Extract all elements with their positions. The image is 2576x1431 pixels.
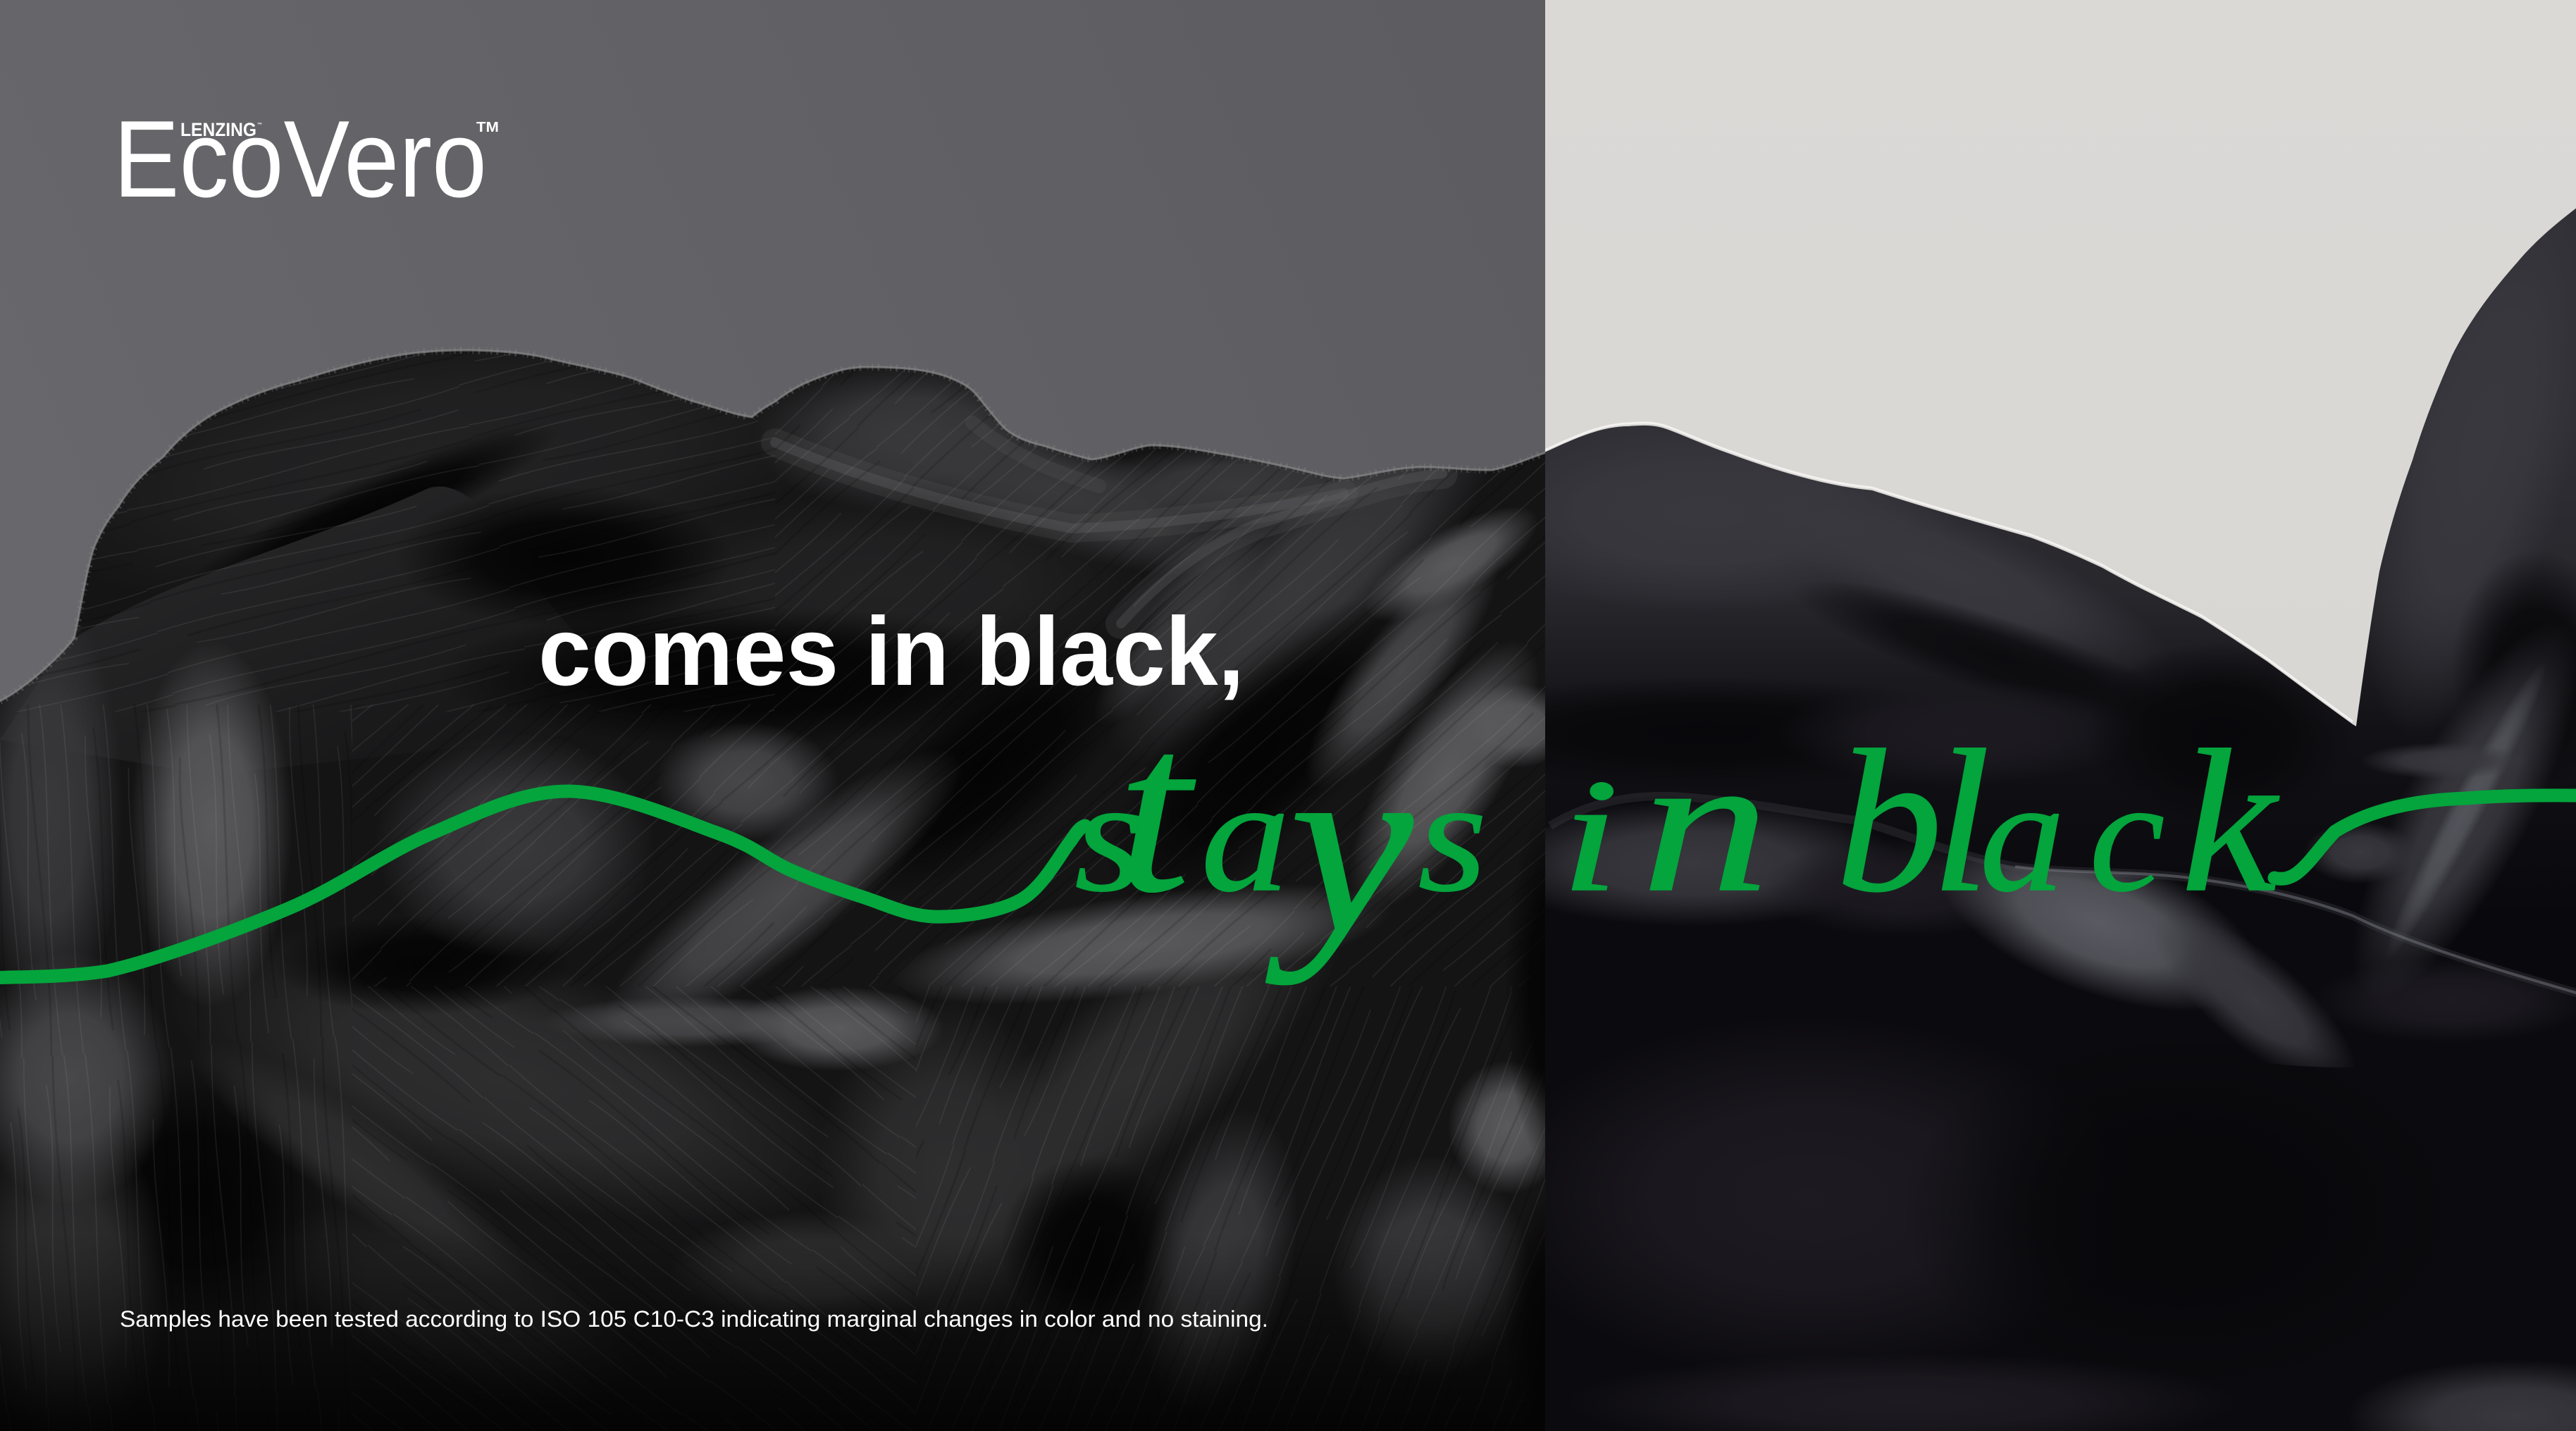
script word black: l: [1931, 709, 1990, 934]
broad fibre shadows and lights: [0, 279, 1544, 1431]
script word stays: a: [1201, 746, 1290, 925]
script word black: b: [1835, 709, 1943, 934]
fold ridge line: [1550, 796, 2576, 996]
logo: Lenzing EcoVero: [113, 98, 499, 220]
fibre silhouette rim: [0, 350, 1550, 701]
dark lower fabric: [1536, 909, 2576, 1431]
fibre hair texture: [0, 317, 1545, 1431]
logo word Lenzing: LENZING: [180, 119, 256, 140]
fabric edge highlight: [1536, 423, 2353, 721]
photo panel: black fibre on grey: [0, 0, 1603, 1431]
upper fabric above the fold ridge: [1536, 197, 2576, 996]
fibre bottom shadow: [0, 1263, 1535, 1431]
upper fold tones: [1409, 142, 2576, 1027]
script word in: i: [1561, 745, 1619, 925]
light backdrop: [1545, 0, 2576, 726]
faint lower folds: [1487, 1015, 2576, 1431]
script word stays: y: [1263, 704, 1416, 986]
script word stays: s: [1075, 746, 1144, 925]
script word black: a: [1980, 746, 2064, 926]
right edge shadows: [1511, 853, 1545, 1382]
footnote: Samples have been tested according to ISO 105 C10-C3 indicating marginal changes in color and no staining.: [120, 1306, 1268, 1332]
photo panel: black fabric on light backdrop: [1545, 0, 2576, 1431]
headline: comes in black,: [538, 597, 1244, 706]
green wave entering the script: [0, 791, 1085, 978]
script word black: c: [2089, 746, 2165, 926]
fabric mass: [1545, 209, 2576, 1431]
lit area below the fold ridge: [1480, 799, 2576, 1117]
fibre base tone: [0, 317, 1545, 1431]
green wave leaving the script: [2274, 795, 2576, 879]
trademark: TM: [476, 120, 499, 135]
lit fibre ridges: [775, 423, 1442, 624]
fibre strands: [0, 485, 1578, 1325]
script word stays: t: [1117, 677, 1199, 942]
fibre mass: [0, 279, 1603, 1431]
second strand with crisp upper edge: [58, 486, 506, 762]
small trademark on Lenzing: ™: [257, 123, 262, 128]
handwritten line: wave and stays in black: [0, 677, 2576, 986]
script word stays: s: [1418, 746, 1487, 925]
script word black: k: [2181, 709, 2281, 934]
script word in: n: [1641, 715, 1769, 933]
grey studio backdrop: [0, 0, 1545, 701]
fabric lower base: [1545, 705, 2576, 1068]
logo word EcoVero: EcoVero: [113, 98, 487, 220]
